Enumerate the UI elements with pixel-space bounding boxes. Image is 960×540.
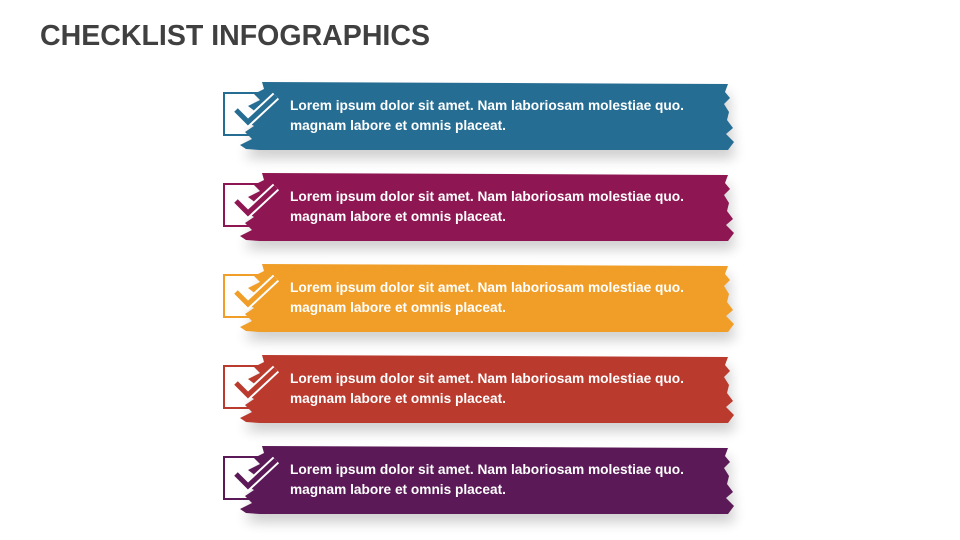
- text 5: magnam labore et omnis placeat.: [290, 482, 506, 497]
- title: CHECKLIST INFOGRAPHICS: [40, 20, 430, 52]
- checkbox 3: [224, 275, 276, 317]
- checkbox 4: [224, 366, 276, 408]
- text 3: magnam labore et omnis placeat.: [290, 300, 506, 315]
- item 4: red: [224, 355, 737, 432]
- text 1: [290, 98, 684, 133]
- text 3: Lorem ipsum dolor sit amet. Nam laboriosam molestiae quo.: [290, 280, 684, 295]
- text 2: Lorem ipsum dolor sit amet. Nam laboriosam molestiae quo.: [290, 189, 684, 204]
- text 4: magnam labore et omnis placeat.: [290, 391, 506, 406]
- text 1: Lorem ipsum dolor sit amet. Nam laboriosam molestiae quo.: [290, 98, 684, 113]
- item 2: magenta: [224, 173, 737, 250]
- item 1: blue: [224, 82, 737, 159]
- text 2: [290, 189, 684, 224]
- text 4: Lorem ipsum dolor sit amet. Nam laboriosam molestiae quo.: [290, 371, 684, 386]
- text 1: magnam labore et omnis placeat.: [290, 118, 506, 133]
- text 5: Lorem ipsum dolor sit amet. Nam laboriosam molestiae quo.: [290, 462, 684, 477]
- text 4: [290, 371, 684, 406]
- item 3: orange: [224, 264, 737, 341]
- text 3: [290, 280, 684, 315]
- checkbox 1: [224, 93, 276, 135]
- checkbox 5: [224, 457, 276, 499]
- text 5: [290, 462, 684, 497]
- item 5: purple: [224, 446, 737, 523]
- checkbox 2: [224, 184, 276, 226]
- text 2: magnam labore et omnis placeat.: [290, 209, 506, 224]
